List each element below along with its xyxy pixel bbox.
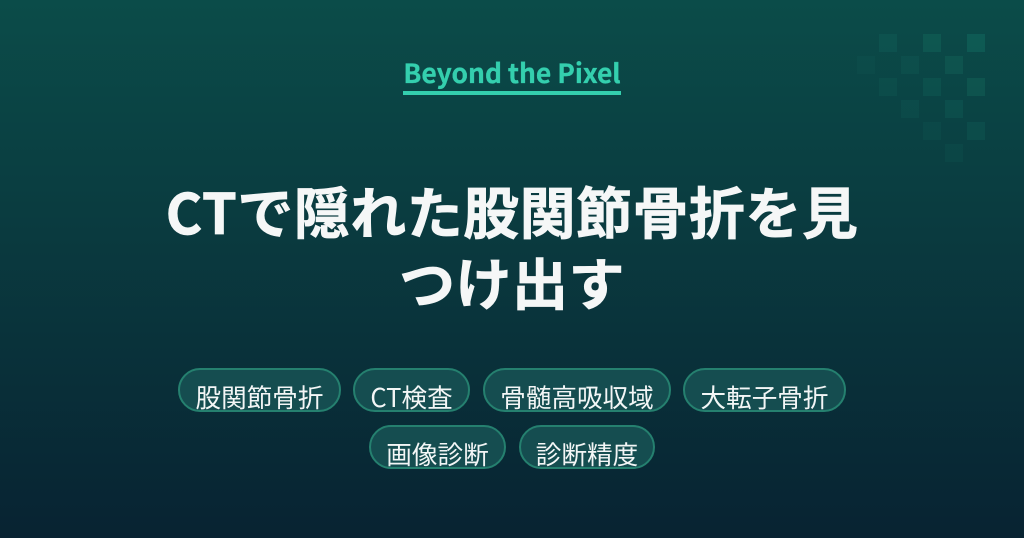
tag: marrow: 骨髄高吸収域 <box>500 378 654 414</box>
tag: imaging diagnosis <box>369 425 506 469</box>
tags <box>178 368 846 472</box>
tag: CT <box>353 368 470 412</box>
tag: marrow <box>483 368 671 412</box>
tag: accuracy: 診断精度 <box>536 434 638 472</box>
tag: CT: CT検査 <box>370 378 453 414</box>
decorative pixel grid <box>879 34 985 140</box>
title <box>166 170 858 322</box>
tag: imaging diagnosis: 画像診断 <box>386 434 489 472</box>
tag: hip fracture <box>178 368 341 412</box>
title: つけ出す <box>399 241 625 322</box>
tag: trochanter <box>683 368 846 412</box>
title: CTで隠れた股関節骨折を見 <box>166 170 858 251</box>
tag: trochanter: 大転子骨折 <box>700 378 828 414</box>
tag: hip fracture: 股関節骨折 <box>196 378 323 414</box>
tag: accuracy <box>519 425 655 469</box>
brand label: Beyond the Pixel <box>403 52 621 91</box>
